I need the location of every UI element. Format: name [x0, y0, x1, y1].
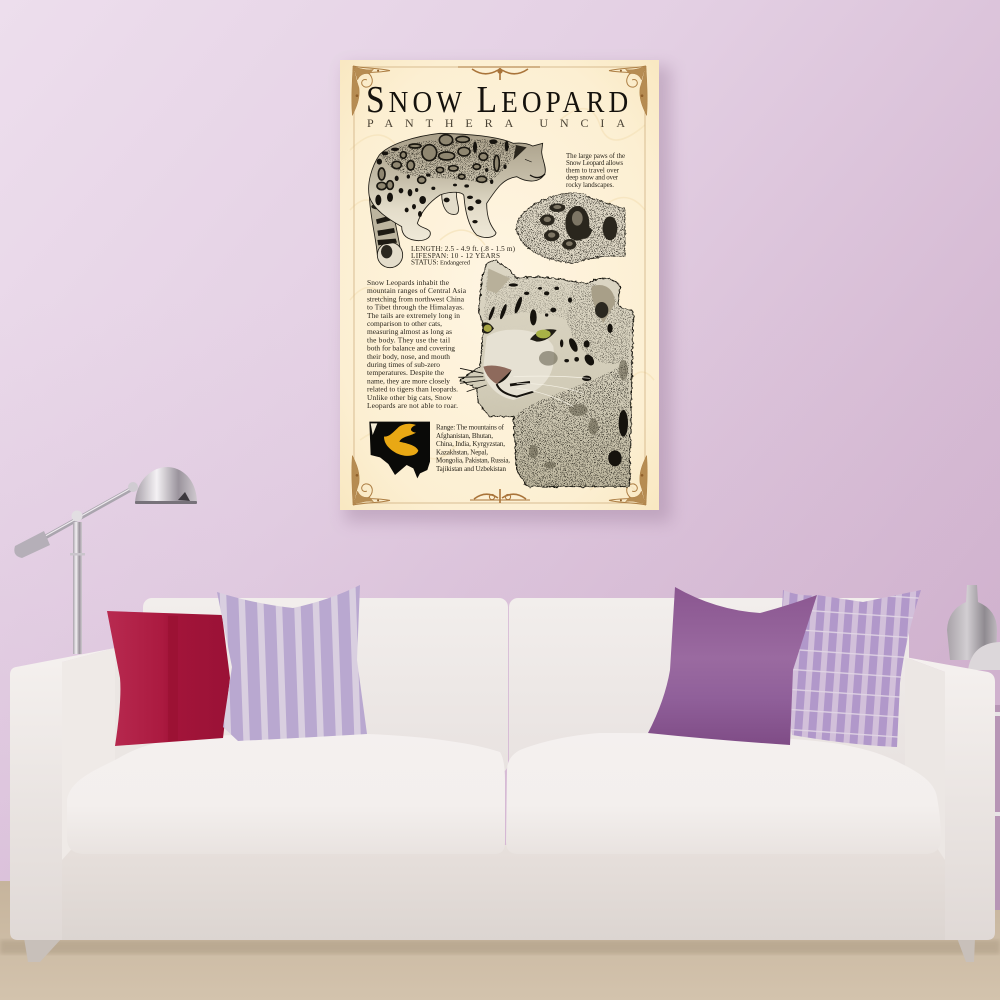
caption: paws: them to travel over [566, 167, 620, 174]
pillow: red [107, 611, 230, 746]
main description text: both for balance and covering [367, 344, 455, 353]
range caption: Afghanistan, Bhutan, [436, 432, 493, 440]
main description text: the body. They use the tail [367, 335, 450, 344]
ornament: top left corner [352, 66, 390, 116]
ornament: bottom left corner [352, 456, 390, 505]
main description text [367, 278, 467, 410]
main description text: measuring almost as long as [367, 327, 452, 336]
caption: paws: rocky landscapes. [566, 182, 614, 189]
far foreleg [442, 192, 459, 214]
title: SNOW LEOPARD [366, 78, 628, 120]
poster shadow [345, 66, 671, 522]
main description text: Unlike other big cats, Snow [367, 393, 453, 402]
range caption: Mongolia, Pakistan, Russia, [436, 457, 510, 465]
ornament: bottom centre flourish [470, 489, 530, 503]
coat rosettes [377, 135, 499, 190]
sofa right arm [905, 657, 995, 940]
sofa left arm [10, 648, 115, 940]
caption: paws: The large paws of the [566, 153, 625, 160]
main description text: to Tibet through the Himalayas. [367, 303, 464, 312]
stipple on neck [514, 360, 629, 486]
caption: paws: deep snow and over [566, 175, 619, 182]
main description text: during times of sub-zero [367, 360, 440, 369]
stats block: LIFESPAN: 10 - 12 YEARS [411, 252, 500, 260]
stats block: LENGTH: 2.5 - 4.9 ft. (.8 - 1.5 m) [411, 245, 516, 253]
ornament: bottom right corner [609, 456, 647, 505]
soft neck patches [529, 351, 628, 468]
range caption: Tajikistan and Uzbekistan [436, 465, 506, 473]
stippled shading [380, 139, 517, 183]
range caption: Kazakhstan, Nepal, [436, 448, 488, 456]
ear and face [513, 145, 545, 178]
floor lamp [14, 467, 197, 654]
range map [369, 422, 430, 478]
caption: paws: Snow Leopard allows [566, 160, 623, 167]
sofa seat: right [506, 733, 941, 854]
eyes [482, 322, 557, 342]
main description text: Snow Leopards inhabit the [367, 278, 450, 287]
body, near legs and head [369, 133, 545, 241]
sofa seat: left [67, 733, 505, 854]
main description text: stretching from northwest China [367, 294, 465, 303]
stats block: STATUS: Endangered [411, 258, 471, 266]
main description text: comparison to other cats, [367, 319, 442, 328]
main description text: name, they are more closely [367, 376, 450, 385]
pale muzzle and forehead [483, 330, 554, 400]
illustration: full body snow leopard [369, 133, 545, 268]
range caption [436, 424, 510, 473]
nose and mouth [483, 366, 533, 397]
caption: paws [566, 153, 625, 189]
floor carpet [0, 881, 1000, 1000]
main description text: Leopards are not able to roar. [367, 401, 458, 410]
ornament: top centre flourish [458, 67, 540, 80]
stats block [411, 245, 516, 266]
main description text: related to tigers than leopards. [367, 385, 458, 394]
main description text: temperatures. Despite the [367, 368, 445, 377]
side shelf [994, 705, 1000, 910]
pillow: lilac stripes [217, 585, 367, 741]
sofa legs [24, 938, 975, 962]
main description text: The tails are extremely long in [367, 311, 460, 320]
range caption: China, India, Kyrgyzstan, [436, 440, 505, 448]
illustration: paw [516, 193, 625, 263]
sofa base [55, 845, 950, 940]
solid spots [375, 139, 509, 223]
tail [369, 187, 403, 268]
whiskers [513, 376, 590, 407]
ears [487, 268, 615, 323]
ornament: top right corner [609, 66, 647, 116]
pillow: lilac grid [780, 590, 921, 747]
subtitle: PANTHERA UNCIA [367, 116, 625, 130]
main description text: their body, nose, and mouth [367, 352, 450, 361]
border line [354, 67, 645, 503]
sofa back cushions [110, 598, 909, 800]
pillow: purple [648, 587, 817, 745]
poster: Snow Leopard [340, 60, 659, 510]
poster background swirls [350, 109, 654, 490]
silver vase [947, 585, 1000, 670]
main description text: mountain ranges of Central Asia [367, 286, 467, 295]
face markings [488, 283, 628, 466]
range caption: Range: The mountains of [436, 424, 505, 432]
illustration: snow leopard head [458, 260, 633, 487]
